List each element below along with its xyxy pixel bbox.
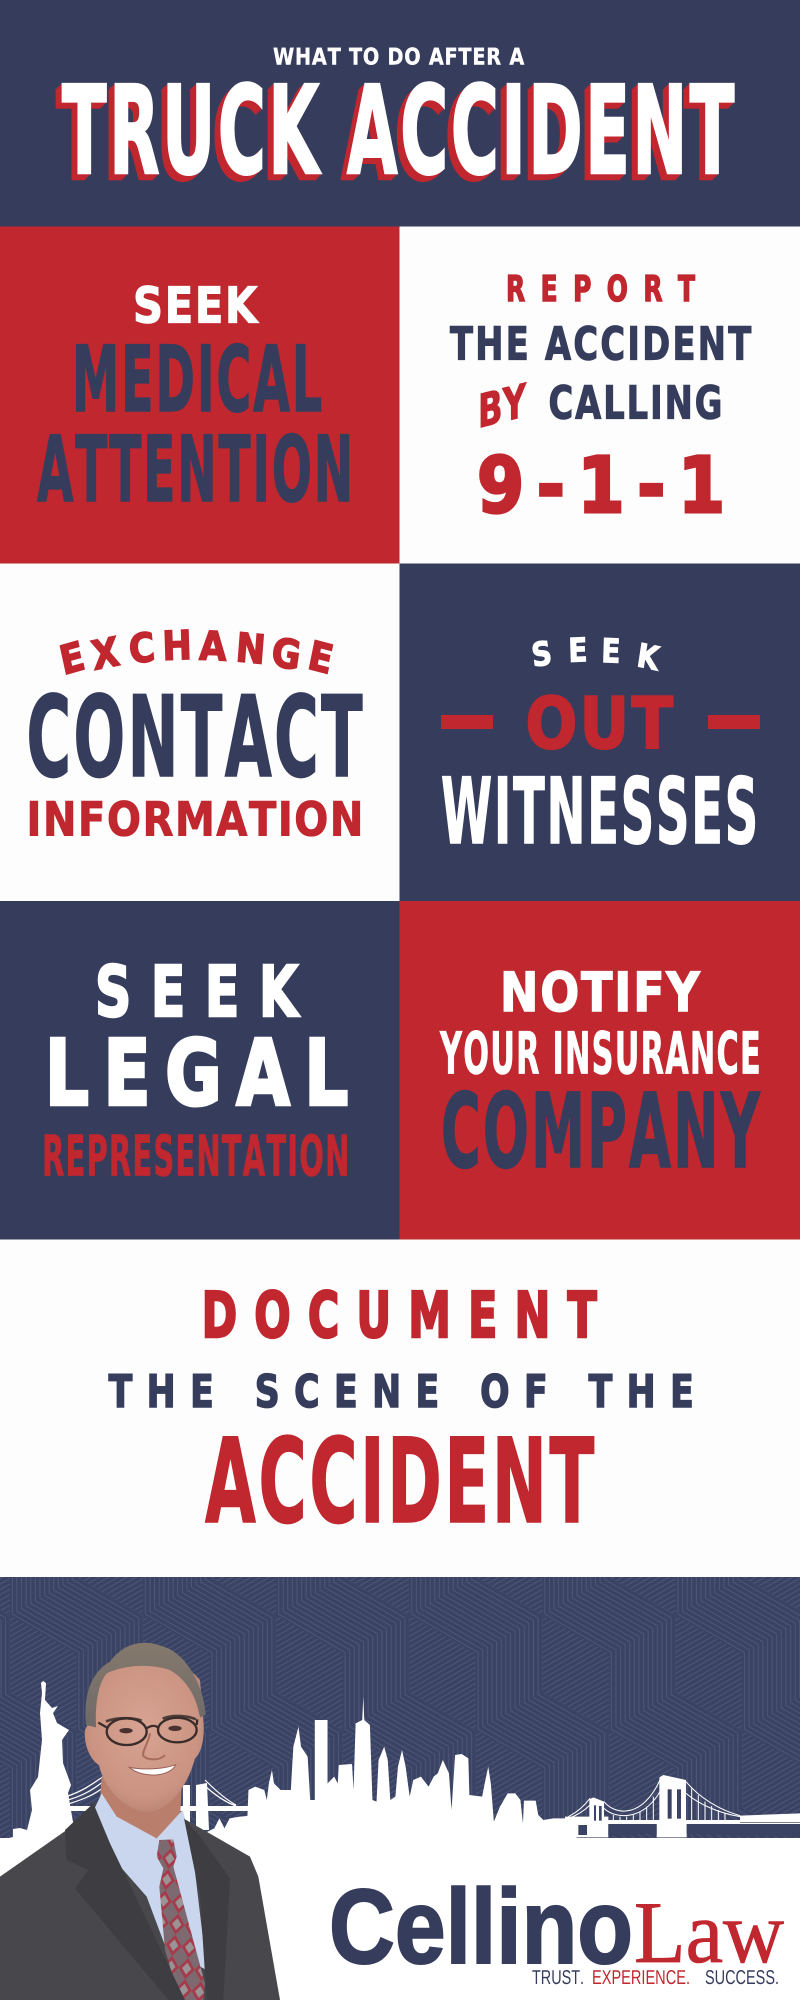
patterned background	[0, 1577, 800, 2000]
midtown skyline	[204, 1697, 577, 1843]
seek arched: SEEK	[529, 630, 663, 679]
legal: LEGAL	[45, 1022, 348, 1126]
suit	[0, 1802, 280, 2000]
exchange arched: EXCHANGE	[56, 623, 337, 685]
left dash	[441, 715, 493, 729]
tagline: EXPERIENCE.	[592, 1967, 690, 1989]
by: BY	[478, 373, 526, 439]
left bridge	[68, 1776, 248, 1811]
brooklyn bridge	[563, 1775, 800, 1837]
eyebrows	[106, 1716, 196, 1721]
seek: SEEK	[95, 951, 300, 1033]
glasses	[98, 1718, 197, 1745]
attention: ATTENTION	[37, 418, 355, 523]
tie	[157, 1839, 205, 2000]
representation: REPRESENTATION	[42, 1125, 350, 1190]
law wordmark: Law	[634, 1885, 784, 1982]
out: OUT	[526, 682, 676, 765]
attorney portrait	[0, 1643, 280, 2000]
contact: CONTACT	[26, 673, 365, 803]
city skyline silhouette	[0, 1681, 800, 2000]
medical: MEDICAL	[72, 328, 324, 433]
nose	[143, 1733, 165, 1759]
right dash	[708, 715, 760, 729]
phone number 9-1-1: 9-1-1	[477, 442, 725, 531]
subtitle: WHAT TO DO AFTER A	[273, 44, 525, 70]
tagline	[532, 1967, 779, 1989]
shirt and collar	[91, 1793, 207, 1970]
the scene of the: THE SCENE OF THE	[109, 1365, 694, 1418]
tagline: TRUST.	[532, 1967, 584, 1989]
panel: seek out witnesses	[400, 564, 800, 901]
panel: document the scene	[0, 1240, 800, 1577]
panel: title banner	[0, 0, 800, 226]
lapels	[65, 1803, 185, 2000]
seek label: SEEK	[133, 276, 259, 334]
panel: footer	[0, 1577, 800, 2000]
the accident: THE ACCIDENT	[450, 317, 751, 370]
information: INFORMATION	[26, 792, 365, 848]
panel: notify your insurance company	[400, 901, 800, 1240]
eyes	[119, 1726, 182, 1733]
notify: NOTIFY	[500, 961, 702, 1024]
panel: exchange contact information	[0, 564, 400, 901]
calling: CALLING	[548, 376, 722, 429]
report: REPORT	[506, 269, 696, 310]
smile	[129, 1765, 176, 1775]
cellino wordmark: Cellino	[329, 1868, 633, 1986]
neck	[100, 1777, 182, 1838]
face	[85, 1659, 204, 1812]
panel: seek medical attention	[0, 226, 400, 564]
ground	[0, 1838, 800, 2000]
panel: seek legal representation	[0, 901, 400, 1240]
panel: report the accident	[400, 226, 800, 564]
document: DOCUMENT	[202, 1279, 597, 1352]
hair	[85, 1643, 206, 1727]
logo: Cellino Law	[329, 1868, 784, 1989]
statue of liberty	[0, 1681, 90, 1840]
